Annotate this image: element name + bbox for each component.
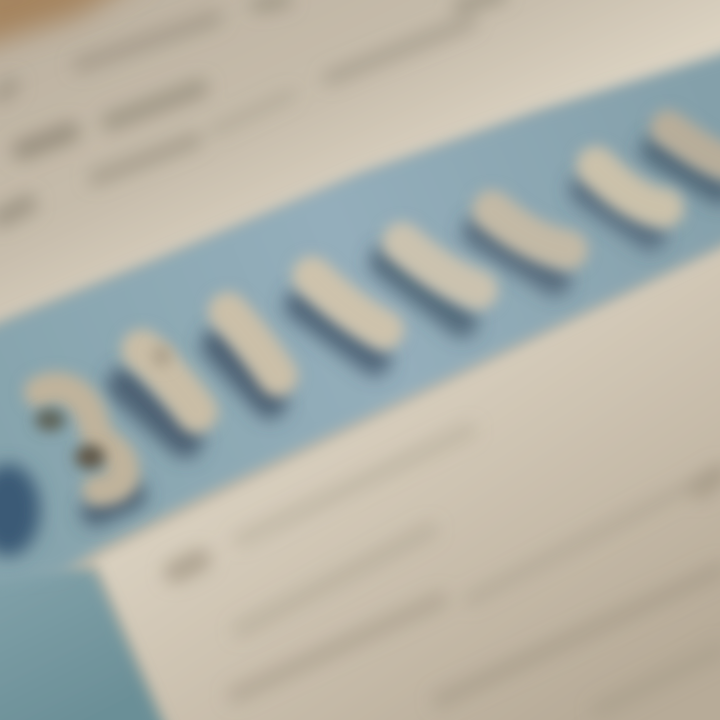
embossed characters [40, 128, 720, 490]
character: pill 5 [402, 242, 478, 290]
wood corner top left [0, 0, 150, 50]
dip in the y [152, 345, 172, 367]
character: pill 8 [668, 128, 720, 162]
blurred printed text: lower sheet [175, 430, 720, 710]
lower left blue area [0, 555, 175, 720]
character: y [142, 350, 197, 412]
character shadows on the blue band [95, 150, 720, 512]
lower paper sheet [95, 232, 720, 720]
paper: upper sheet [0, 0, 720, 335]
character: pill 7 [596, 166, 664, 208]
character: v [228, 312, 278, 376]
holes in the 3 [35, 409, 105, 469]
character: 3 [40, 388, 124, 490]
blurred printed text: upper sheet [0, 0, 500, 218]
dark blue shadow at left edge [0, 464, 40, 556]
character: pill 6 [492, 210, 568, 250]
blue band [0, 45, 720, 585]
character: w [312, 276, 384, 330]
